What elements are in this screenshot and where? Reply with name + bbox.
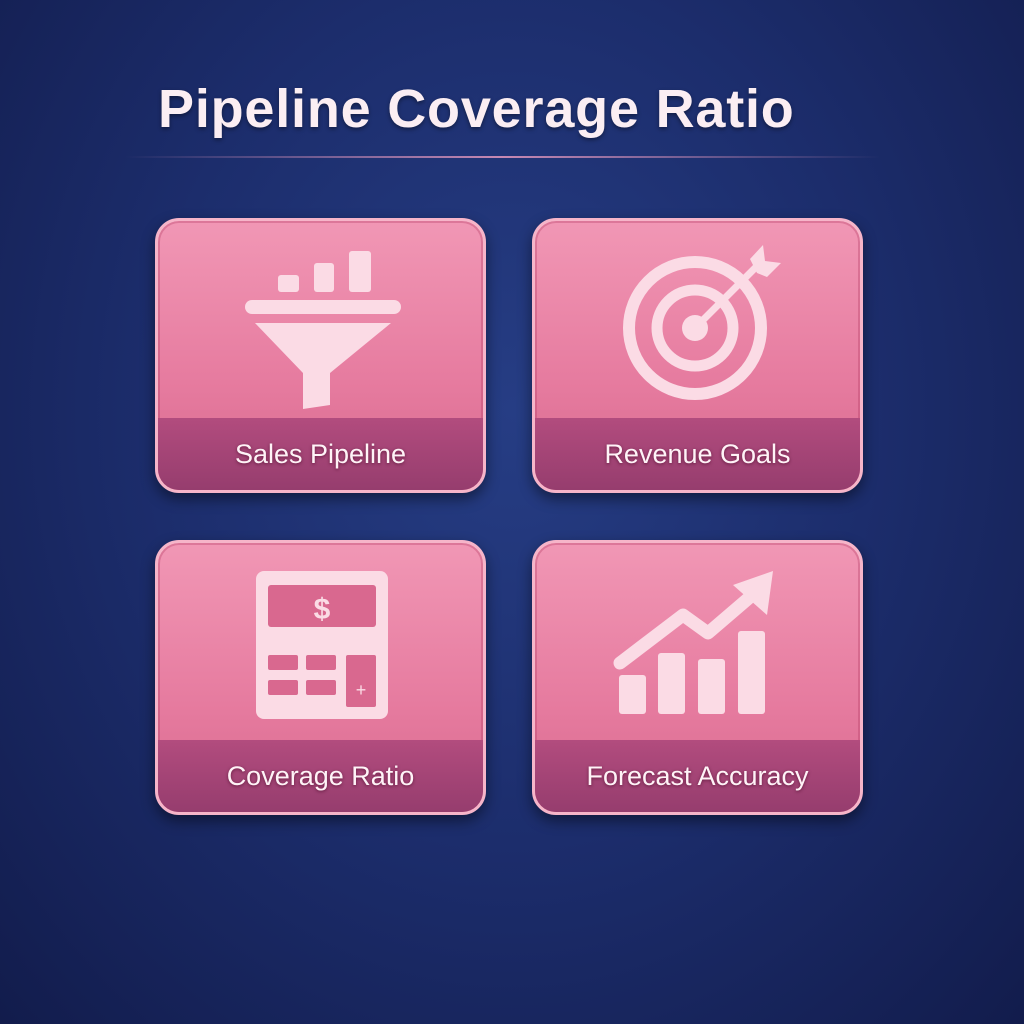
label: Forecast Accuracy [586,760,809,790]
icon: growth chart [614,571,773,714]
label: Coverage Ratio [227,760,414,790]
panel: coverage ratio [155,540,486,815]
panel: revenue goals [532,218,863,493]
panel: forecast accuracy [532,540,863,815]
label [535,740,860,812]
icon: calculator: + [356,680,366,700]
label: Sales Pipeline [235,438,406,468]
panel: sales pipeline [155,218,486,493]
icon: target [623,245,781,400]
label [158,418,483,490]
label [158,740,483,812]
title: Pipeline Coverage Ratio [158,79,795,139]
icon: calculator [256,571,388,719]
icon: calculator: $ [314,593,331,626]
label [535,418,860,490]
label: Revenue Goals [604,438,791,468]
icon: funnel [245,251,401,409]
